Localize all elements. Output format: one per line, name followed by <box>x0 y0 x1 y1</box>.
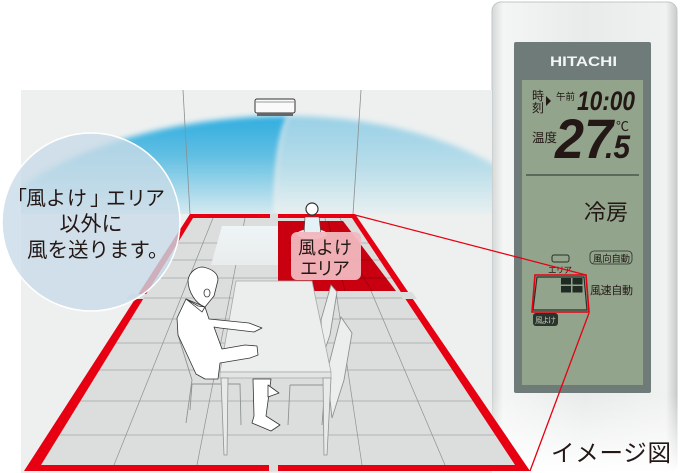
red wind-shelter zone <box>278 221 396 291</box>
panel: room scene <box>0 90 530 473</box>
frame gaps <box>126 214 417 472</box>
clock: 刻 <box>532 101 544 115</box>
wall corner lines <box>183 90 361 214</box>
clock: 10:00 <box>577 86 635 116</box>
wind shelter badge: 風よけ <box>535 316 556 325</box>
callout: wind shelter area label: エリア <box>300 259 350 279</box>
wind shelter badge <box>533 313 558 326</box>
callout: circle message: 風を送ります。 <box>27 239 168 262</box>
floor <box>24 214 530 471</box>
wind direction auto <box>590 251 632 265</box>
LCD divider <box>526 174 639 176</box>
bottom fade of remote <box>491 395 680 473</box>
area icon and label <box>548 255 572 275</box>
dark face panel <box>514 42 651 393</box>
brand name: HITACHI <box>550 54 617 69</box>
temperature: .5 <box>605 129 631 165</box>
red floor frame <box>24 214 530 471</box>
caption: イメージ図 <box>551 440 671 466</box>
small seated person <box>297 203 327 239</box>
floor tile lines <box>47 218 506 465</box>
wind: airflow <box>10 116 500 220</box>
wind: pale airflow right of unit <box>275 116 500 220</box>
chairs <box>178 285 352 425</box>
panel: remote controller <box>491 2 680 473</box>
callout: wind shelter area label <box>291 232 361 280</box>
wind: blue airflow left of unit <box>10 116 288 220</box>
callout: wind shelter area label: 風よけ <box>298 238 352 258</box>
area icon and label: エリア <box>548 265 572 275</box>
wind direction auto: 風向自動 <box>593 253 630 265</box>
LCD screen <box>522 80 643 385</box>
clock: 午前 <box>556 91 575 103</box>
wind speed auto: 風速自動 <box>590 283 633 297</box>
temperature <box>532 107 631 170</box>
clock <box>532 86 635 116</box>
callout: circle message: 以外に <box>60 213 122 236</box>
callout: circle message: 「風よけ」エリア <box>7 187 165 210</box>
area diagram <box>533 277 587 310</box>
red leader lines and frame <box>355 215 589 471</box>
temperature: 温度 <box>532 130 557 145</box>
dining table <box>220 281 331 455</box>
clock: 時 <box>532 89 544 103</box>
back table <box>211 226 278 265</box>
seated person <box>177 267 280 431</box>
callout: circle message <box>2 133 180 311</box>
icon: air conditioner <box>255 99 295 116</box>
temperature: ℃ <box>616 119 629 134</box>
temperature: 27 <box>554 107 616 170</box>
mode text: 冷房 <box>584 200 628 225</box>
